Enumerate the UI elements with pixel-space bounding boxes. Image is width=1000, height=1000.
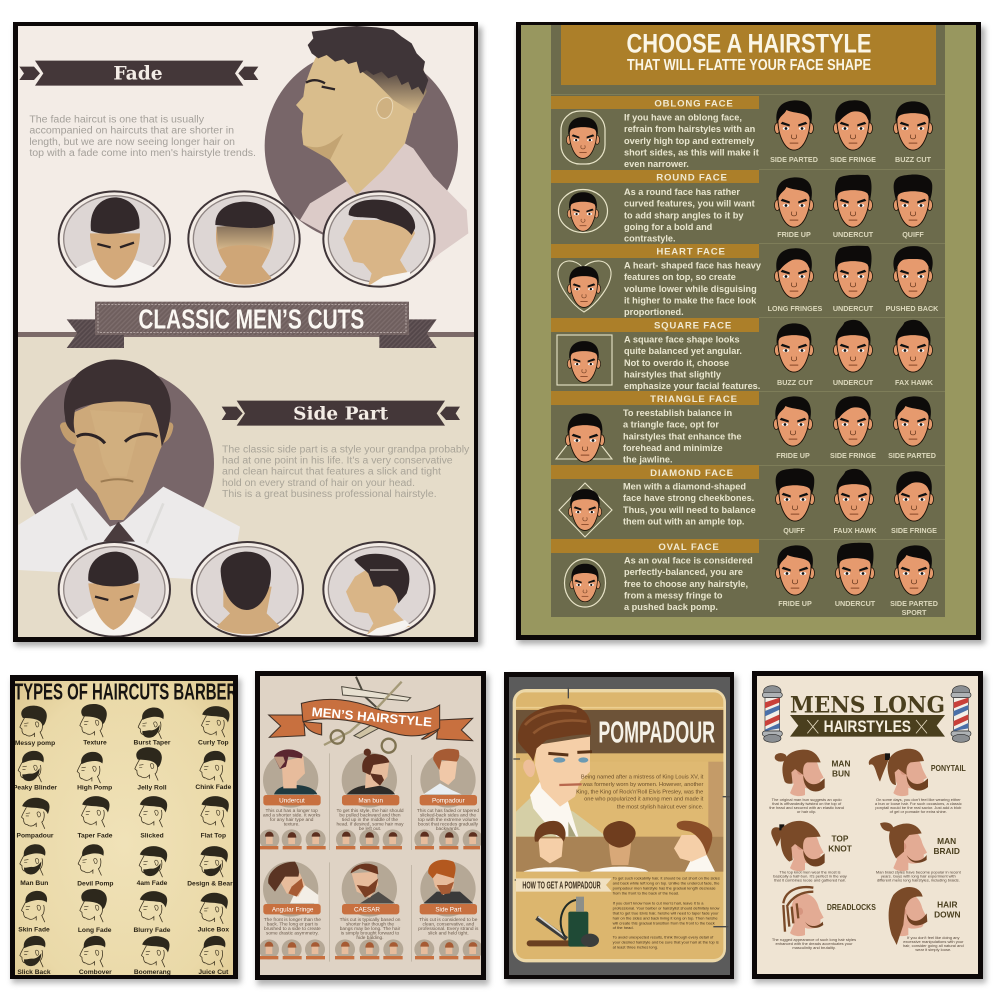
descriptions: The rugged appearance of such long hair styles — [772, 937, 856, 942]
title ribbon — [269, 699, 473, 741]
descriptions, bottom row: clean, conservative, and — [423, 921, 474, 927]
small circle: top view — [59, 542, 170, 637]
row: diamond face: face have strong cheekbones. — [623, 493, 754, 503]
descriptions: different mens long hairstyles, including braids. — [877, 877, 960, 882]
top knot: KNOT — [828, 844, 852, 854]
descriptions, top row: slicked-back sides and the — [420, 812, 476, 818]
row: oval face: OVAL FACE — [658, 542, 720, 553]
name tags, top row — [263, 795, 477, 805]
haircut labels: Messy pomp — [15, 740, 55, 747]
descriptions, bottom row: bangs may be long. The hair — [340, 926, 401, 932]
fade section: illustration of a man in profile — [19, 26, 468, 348]
hairstyles ribbon: HAIRSTYLES — [824, 717, 911, 736]
top knot — [771, 821, 852, 871]
descriptions: On some days, you don't feel like wearing either — [876, 797, 961, 802]
row: oblong face: If you have an oblong face, — [624, 112, 742, 122]
row: square face: BUZZ CUT — [777, 378, 814, 387]
title block: THAT WILL FLATTE YOUR FACE SHAPE — [627, 57, 871, 74]
descriptions: If you don't feel like doing any — [907, 935, 960, 940]
row: square face: Not to overdo it, choose — [624, 358, 729, 368]
haircut labels: Juice Cut — [198, 969, 229, 976]
row: round face — [551, 170, 932, 244]
haircut labels: Chink Fade — [195, 784, 232, 791]
descriptions, top row: This cut has a longer top — [265, 808, 318, 814]
barber pole right — [951, 686, 971, 742]
row: oblong face: short sides, as this will make it — [624, 148, 759, 158]
row: square face: FAX HAWK — [895, 378, 934, 387]
small circle: profile view — [323, 542, 435, 637]
row: diamond face — [551, 465, 937, 537]
row: oval face: SPORT — [902, 608, 927, 617]
name tags, top row: Pompadour — [432, 797, 465, 804]
body copy: intro: King, the King of Rock'n'Roll Elvis Presley, was the — [576, 789, 703, 795]
body copy: how-to: and back while left long on top. Unlike the undercut fade, the — [613, 881, 720, 886]
style: caesar — [342, 861, 397, 917]
haircut labels: Man Bun — [20, 880, 48, 887]
haircut labels: Peaky Blinder — [13, 784, 57, 791]
row: round face: FRIDE UP — [777, 230, 811, 239]
row: triangle face — [551, 391, 936, 465]
pompadour portrait — [516, 705, 607, 837]
row: square face: hairstyles that slightly — [624, 370, 722, 380]
descriptions: The top knot men wear the most is — [779, 869, 841, 874]
fade ribbon: Fade — [113, 63, 163, 85]
hair down: HAIR — [937, 899, 958, 909]
descriptions, top row: This cut has faded or tapered — [417, 808, 479, 814]
row: triangle face: SIDE PARTED — [888, 451, 936, 460]
small circle: rear view — [192, 542, 303, 637]
descriptions, bottom row: This cut is considered to be — [419, 917, 478, 923]
row: oval face: from a messy fringe to — [624, 590, 723, 600]
haircut labels: Combover — [79, 969, 112, 976]
descriptions, top row: be left out. — [359, 826, 381, 832]
row: triangle face: forehead and minimize — [623, 443, 723, 453]
row: triangle face: FRIDE UP — [776, 451, 810, 460]
fade description: top with a fade come into men's hairstyle trends. — [29, 148, 256, 159]
descriptions, top row: tied up in the middle of the — [342, 817, 398, 823]
haircut labels: Curly Top — [198, 740, 229, 747]
row: oval face — [551, 539, 938, 617]
body copy: how-to: at least three inches long. — [613, 945, 658, 950]
descriptions, bottom row: professional. Every strand is — [418, 926, 479, 932]
row: triangle face: hairstyles that enhance the — [623, 431, 741, 441]
man braid: BRAID — [933, 846, 960, 856]
row: square face: quite balanced yet angular. — [624, 346, 742, 356]
row: heart face: A heart- shaped face has heavy — [624, 260, 762, 270]
row: diamond face: Men with a diamond-shaped — [623, 482, 746, 492]
descriptions, bottom row: The front is longer than the — [264, 917, 321, 923]
row: oblong face: SIDE PARTED — [770, 155, 818, 164]
descriptions: The original man bun suggests an updo — [772, 797, 842, 802]
style: pompadour — [420, 749, 476, 808]
hair down — [889, 887, 961, 945]
name tags, top row: Undercut — [279, 797, 305, 804]
row: oval face: perfectly-balanced, you are — [624, 567, 743, 577]
row: heart face: proportioned. — [624, 307, 684, 317]
descriptions: excessive manipulations with your — [903, 939, 964, 944]
ponytail: PONYTAIL — [931, 763, 966, 773]
row: oval face: free to choose any hairstyle, — [624, 579, 748, 589]
haircut labels: Slicked — [140, 832, 164, 839]
haircut labels: Slick Back — [17, 969, 51, 976]
descriptions, top row: texture. — [284, 821, 300, 827]
body copy: intro — [576, 775, 704, 810]
style: undercut — [263, 749, 318, 808]
row: oblong face: overly high top and extremely — [624, 136, 755, 146]
row: heart face: HEART FACE — [656, 246, 726, 258]
descriptions: of gel or pomade for extra shine. — [890, 809, 947, 814]
descriptions: the head and secured with an elastic band — [769, 805, 844, 810]
haircut chart grid — [18, 704, 230, 967]
inner panel — [551, 25, 945, 617]
small circle: side view — [323, 191, 435, 287]
haircut labels: Pompadour — [17, 833, 54, 840]
row: heart face: features on top, so create — [624, 272, 736, 282]
row: round face: UNDERCUT — [833, 230, 874, 239]
aged card — [513, 689, 726, 962]
descriptions, top row — [263, 808, 479, 830]
descriptions: that is offhandedly twisted on the top of — [772, 801, 842, 806]
body copy: how-to: that to get true Elvis hair, he/she will need to taper fade your — [613, 910, 719, 915]
row: oval face: As an oval face is considered — [624, 556, 753, 566]
body copy: intro: one who popularized it among men and made it — [584, 797, 704, 803]
row: square face: A square face shape looks — [624, 334, 740, 344]
row: diamond face: them out with an ample top. — [623, 516, 744, 526]
descriptions, top row: head. If desired, some hair may — [337, 821, 404, 827]
style: side part — [420, 860, 476, 917]
haircut labels: 4am Fade — [137, 880, 168, 887]
haircut labels: Devil Pomp — [77, 880, 113, 887]
row: heart face: LONG FRINGES — [768, 304, 823, 313]
man bun — [775, 750, 850, 796]
body copy: how-to: To avoid unexpected results, think through every detail of — [613, 935, 714, 940]
small circle: back view — [188, 191, 300, 287]
body copy: how-to: your desired hairstyle and be sure that your hair at the top is — [613, 940, 719, 945]
body copy: how-to: will create this gradual transition from the front to the back — [613, 920, 715, 925]
haircut labels: Blurry Fade — [133, 927, 171, 934]
descriptions: a bun or loose hair. For such occasions, a classic — [875, 801, 962, 806]
row: oval face: a pushed back pomp. — [624, 602, 718, 612]
mini views, top row — [259, 829, 483, 849]
descriptions, top row: be pulled backward and then — [339, 812, 401, 818]
haircut labels: Flat Top — [201, 833, 226, 840]
poster: mens long hairstyles — [752, 671, 986, 983]
row: heart face: UNDERCUT — [833, 304, 874, 313]
row: diamond face: Thus, you will need to balance — [623, 505, 756, 515]
row: square face — [551, 318, 934, 391]
body copy: how-to: professional. Your barber or hairstylist should definitely know — [613, 905, 720, 910]
title block: CHOOSE A HAIRSTYLE — [626, 28, 872, 58]
ponytail — [869, 749, 966, 796]
hair down: DOWN — [934, 909, 961, 919]
descriptions, top row: and a shorter side. It works — [263, 812, 321, 818]
descriptions, bottom row: is simply brought forward to — [341, 930, 400, 936]
fade description: accompanied on haircuts that are shorter in — [29, 126, 234, 137]
poster: choose a hairstyle — [516, 22, 985, 644]
row: oblong face: BUZZ CUT — [895, 155, 932, 164]
row: heart face: PUSHED BACK — [886, 304, 939, 313]
poster: pompadour — [504, 672, 737, 983]
descriptions — [769, 797, 964, 952]
descriptions: basically a half-bun. It's perfect in the way — [773, 873, 847, 878]
side part ribbon — [222, 401, 460, 426]
haircut labels: Boomerang — [134, 969, 171, 976]
descriptions: masculinity and brutality. — [792, 945, 836, 950]
mini views, bottom row — [259, 939, 483, 959]
body copy: how-to: pompadour men hairstyle has the gradual length decrease — [613, 886, 716, 891]
row: oblong face: OBLONG FACE — [654, 98, 734, 110]
title: MENS LONG — [790, 692, 945, 718]
dreadlocks — [783, 887, 876, 936]
descriptions, bottom row — [264, 917, 479, 941]
descriptions: ponytail would be the real savior. Just add a blob — [875, 805, 962, 810]
body copy: how-to: If you don't know how to cut men's hair, leave it to a — [613, 900, 704, 905]
man bun: MAN — [832, 759, 850, 769]
body copy: how-to: To get such rockabilly hair, it should be cut short on the sides — [613, 876, 720, 881]
lower band — [516, 837, 723, 872]
barber pole left — [762, 686, 782, 742]
title banner: classic men's cuts: CLASSIC MEN’S CUTS — [138, 304, 364, 335]
side part description: and clean haircut that features a slick and tight — [222, 467, 441, 478]
side part description — [222, 444, 469, 500]
icon: scissors and razor — [324, 677, 411, 753]
side part description: had at one point in his life. It's a very conservative — [222, 455, 453, 466]
side part section — [18, 360, 469, 637]
haircut labels: Design & Beard — [187, 880, 237, 887]
haircut labels: Texture — [83, 740, 107, 747]
row: round face: QUIFF — [902, 230, 924, 239]
row: square face: UNDERCUT — [833, 378, 874, 387]
row: round face: going for a bold and — [624, 222, 712, 232]
row: diamond face: DIAMOND FACE — [650, 468, 734, 479]
poster: types of haircuts barber — [10, 675, 241, 983]
body copy: intro: was formerly worn by women. However, another — [582, 782, 703, 788]
haircut labels: Taper Fade — [77, 833, 113, 840]
body copy: how-to — [613, 876, 720, 950]
descriptions: years. Guys with long hair experiment with — [881, 873, 956, 878]
descriptions, bottom row: brushed to a side to create — [264, 926, 321, 932]
poster: classic men's cuts — [13, 22, 482, 646]
descriptions, top row: To get this style, the hair should — [337, 808, 404, 814]
haircut labels: Juice Box — [198, 927, 229, 934]
descriptions: wear it simply loose. — [915, 947, 951, 952]
title block — [561, 25, 936, 85]
descriptions, bottom row: slick and held tight. — [428, 930, 469, 936]
title ribbon: MEN’S HAIRSTYLE — [311, 705, 432, 730]
name tags, top row: Man bun — [358, 797, 383, 804]
haircut labels: High Pomp — [77, 784, 112, 791]
man bun: BUN — [832, 769, 850, 779]
row: round face: ROUND FACE — [656, 172, 728, 184]
side part description: hold on every strand of hair on your head. — [222, 478, 415, 489]
man braid: MAN — [937, 836, 956, 846]
descriptions: enhanced with the dreads accentuates your — [775, 941, 853, 946]
descriptions, bottom row: hide balding. — [356, 935, 384, 941]
body copy: how-to: hair on the sides and back living it long on top. Then he/she — [613, 915, 718, 920]
haircut labels — [13, 740, 237, 976]
body copy: intro: Being named after a mistress of King Louis XV, it — [581, 775, 704, 781]
row: heart face: it higher to make the face look — [624, 296, 757, 306]
descriptions, top row: backwards. — [436, 826, 460, 832]
man braid — [880, 822, 960, 871]
haircut labels: Jelly Roll — [137, 784, 167, 791]
descriptions: Man braid styles have become popular in recent — [876, 869, 962, 874]
fade ribbon — [19, 61, 258, 86]
row: triangle face: the jawline. — [623, 455, 673, 465]
small circle: front view — [59, 191, 170, 287]
haircut labels: Skin Fade — [18, 927, 50, 934]
descriptions: hair, consider going all natural and — [903, 943, 964, 948]
descriptions, top row: top with the extreme volume — [418, 817, 478, 823]
descriptions, top row: for any hair type and — [270, 817, 314, 823]
views: front, back, side — [523, 821, 715, 872]
descriptions: that it combines loose and gathered hair. — [774, 877, 846, 882]
title banner: classic men's cuts — [67, 302, 437, 348]
side part ribbon: Side Part — [293, 403, 389, 424]
icon: cologne bottle and razor — [527, 897, 599, 947]
row: oval face: FRIDE UP — [778, 599, 812, 608]
row: triangle face: To reestablish balance in — [623, 408, 732, 418]
band across the poster — [18, 332, 474, 337]
body copy: how-to: of the head. — [613, 925, 634, 930]
descriptions, bottom row: some drastic asymmetry. — [266, 930, 319, 936]
title: TYPES OF HAIRCUTS BARBER — [14, 678, 237, 704]
title: POMPADOUR — [598, 715, 715, 749]
row: oblong face: even narrower. — [624, 159, 689, 169]
row: square face: SQUARE FACE — [654, 320, 732, 332]
top knot: TOP — [832, 834, 849, 844]
row: heart face — [551, 244, 939, 317]
header band — [516, 710, 723, 753]
fade description: The fade haircut is one that is usually — [29, 115, 204, 126]
row: square face: emphasize your facial features. — [624, 381, 760, 391]
fade description — [29, 115, 256, 159]
row: diamond face: QUIFF — [783, 526, 805, 535]
side part description: The classic side part is a style your grandpa probably — [222, 444, 469, 455]
side part description: This is a great business professional hairstyle. — [222, 489, 437, 500]
row: round face: contrastyle. — [624, 234, 676, 244]
row: oblong face: SIDE FRINGE — [830, 155, 876, 164]
body copy: intro: the most stylish haircut ever since. — [617, 804, 704, 810]
row: round face: As a round face has rather — [624, 187, 740, 197]
dreadlocks: DREADLOCKS — [827, 902, 876, 912]
row: oblong face: refrain from hairstyles with an — [624, 124, 756, 134]
row: oval face: UNDERCUT — [835, 599, 876, 608]
row: triangle face: a triangle face, opt for — [623, 420, 719, 430]
fade description: length, but we are now seeing longer hair on — [29, 137, 235, 148]
row: round face: curved features, you will want — [624, 199, 755, 209]
row: diamond face: SIDE FRINGE — [891, 526, 937, 535]
haircut labels: Long Fade — [78, 927, 112, 934]
row: oblong face — [551, 96, 932, 169]
row: triangle face: TRIANGLE FACE — [650, 394, 738, 405]
name tags, bottom row: Side Part — [435, 906, 462, 913]
descriptions: or hair clip. — [797, 809, 816, 814]
how-to ribbon: HOW TO GET A POMPADOUR — [522, 880, 601, 891]
descriptions, bottom row: back. The long er part is — [267, 921, 319, 927]
how-to ribbon — [516, 878, 612, 892]
descriptions, top row: boost that recedes gradually — [418, 821, 479, 827]
descriptions, bottom row: This cut is typically based on — [340, 917, 401, 923]
poster: men's hairstyle — [255, 671, 489, 985]
name tags, bottom row — [263, 904, 477, 914]
name tags, bottom row: Angular Fringe — [272, 906, 314, 913]
row: diamond face: FAUX HAWK — [833, 526, 877, 535]
row: round face: to add sharp angles to it by — [624, 210, 744, 220]
style: man bun — [342, 749, 397, 808]
haircut labels: Burst Taper — [134, 740, 171, 747]
name tags, bottom row: CAESAR — [354, 906, 380, 913]
hairstyles ribbon — [790, 715, 945, 737]
style: angular fringe — [263, 861, 318, 917]
row: oval face: SIDE PARTED — [890, 599, 938, 608]
body copy: how-to: from the front to the back of the head. — [613, 891, 679, 896]
descriptions, bottom row: shorter hair though the — [346, 921, 394, 927]
row: heart face: volume lower while disguising — [624, 284, 757, 294]
illustration of a man with a side part — [18, 360, 240, 580]
row: triangle face: SIDE FRINGE — [830, 451, 876, 460]
